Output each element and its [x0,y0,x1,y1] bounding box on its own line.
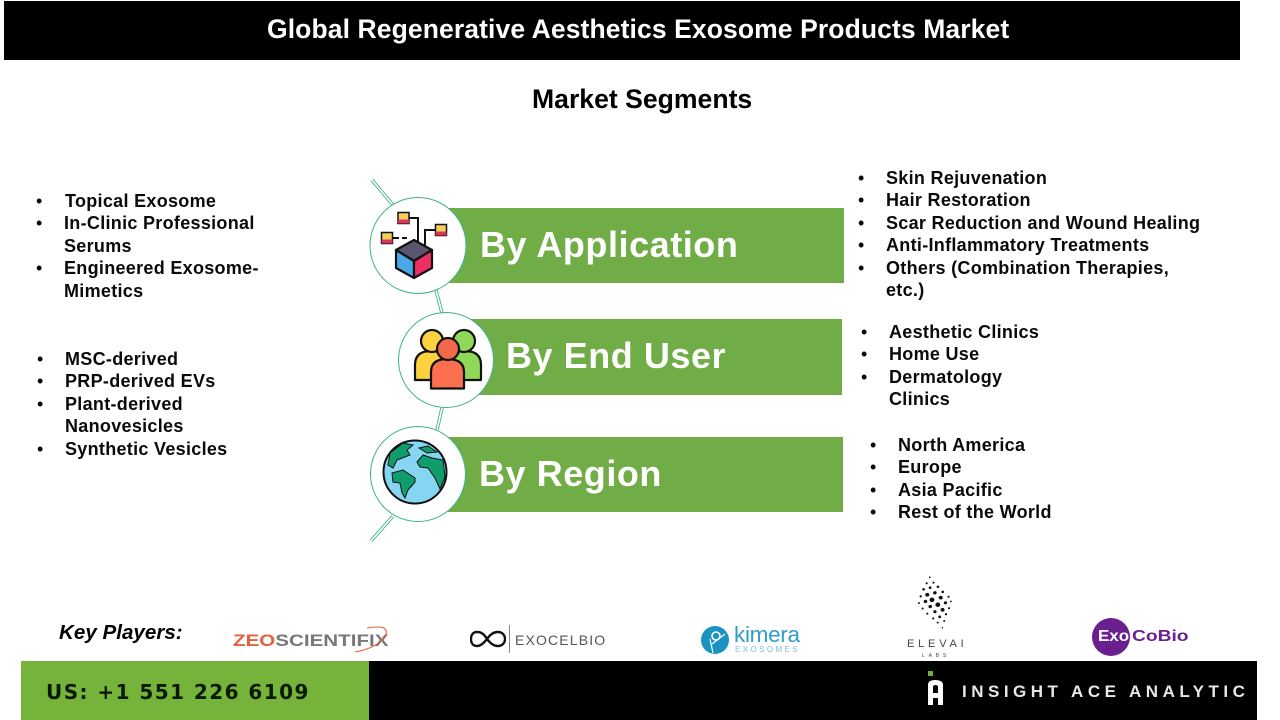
bar: by end user: By End User [506,335,726,376]
icon: end user people [398,312,494,408]
list: left top product types [36,191,259,301]
list: by application items: etc.) [886,280,925,300]
footer: phone panel: US: +1 551 226 6109 [46,680,310,704]
logo: exocobio: Exo [1098,628,1129,645]
brand name: INSIGHT ACE ANALYTIC [962,682,1249,701]
bar: by application [445,208,844,283]
list: left bottom sources: PRP-derived EVs [65,371,216,391]
logo: exocelbio [470,625,606,653]
list: left bottom sources: Nanovesicles [65,416,184,436]
list: left bottom sources: Plant-derived [65,394,183,414]
logo: kimera exosomes: EXOSOMES [735,645,800,654]
logo: insight ace analytic mark [928,671,943,705]
list: by region items: North America [898,435,1025,455]
bar: by end user [470,319,842,395]
logo: exocobio: CoBio [1132,628,1189,645]
list: by application items: Others (Combination Therapies, [886,258,1169,278]
list: by end user items: Aesthetic Clinics [889,322,1039,342]
list: by end user items: Clinics [889,389,950,409]
bar: by application: By Application [480,224,738,265]
list: by region items: Rest of the World [898,502,1052,522]
icon: application cube network [370,197,466,294]
list: by application items: Anti-Inflammatory Treatments [886,235,1149,255]
footer: phone panel [21,661,369,720]
list: left bottom sources [38,349,228,459]
logo: kimera exosomes [701,622,800,654]
list: by application items: Scar Reduction and Wound Healing [886,213,1200,233]
bar: by region [445,437,843,512]
title banner [4,1,1240,60]
logo: kimera exosomes: kimera [734,622,800,647]
list: left bottom sources: Synthetic Vesicles [65,439,228,459]
logo: elevai labs: LABS [922,653,950,659]
list: by region items [870,435,1052,522]
list: left top product types: Topical Exosome [65,191,216,211]
title banner: Global Regenerative Aesthetics Exosome Products Market [267,14,1009,44]
logo: elevai labs: ELEVAI [907,638,968,650]
logo: exocelbio: EXOCELBIO [515,632,606,648]
list: left top product types: Mimetics [64,281,143,301]
list: left top product types: Engineered Exosome- [64,258,259,278]
list: by region items: Europe [898,457,962,477]
logo: zeo scientifix: ZEOSCIENTIFIX [233,631,388,650]
logo: elevai labs [907,576,968,659]
list: by end user items: Dermatology [889,367,1002,387]
list: by end user items: Home Use [889,344,979,364]
label: key players: Key Players: [59,621,183,644]
footer: brand panel [369,661,1257,720]
connector lines [370,178,444,542]
list: by region items: Asia Pacific [898,480,1003,500]
list: by application items [858,168,1200,300]
bar: by region: By Region [479,453,662,494]
heading: market segments: Market Segments [532,84,752,114]
icon: region globe [370,426,466,522]
logo: exocobio [1092,618,1189,656]
list: left bottom sources: MSC-derived [65,349,178,369]
list: by end user items [862,322,1039,409]
list: by application items: Skin Rejuvenation [886,168,1047,188]
list: left top product types: In-Clinic Professional [64,213,255,233]
list: by application items: Hair Restoration [886,190,1031,210]
list: left top product types: Serums [64,236,132,256]
